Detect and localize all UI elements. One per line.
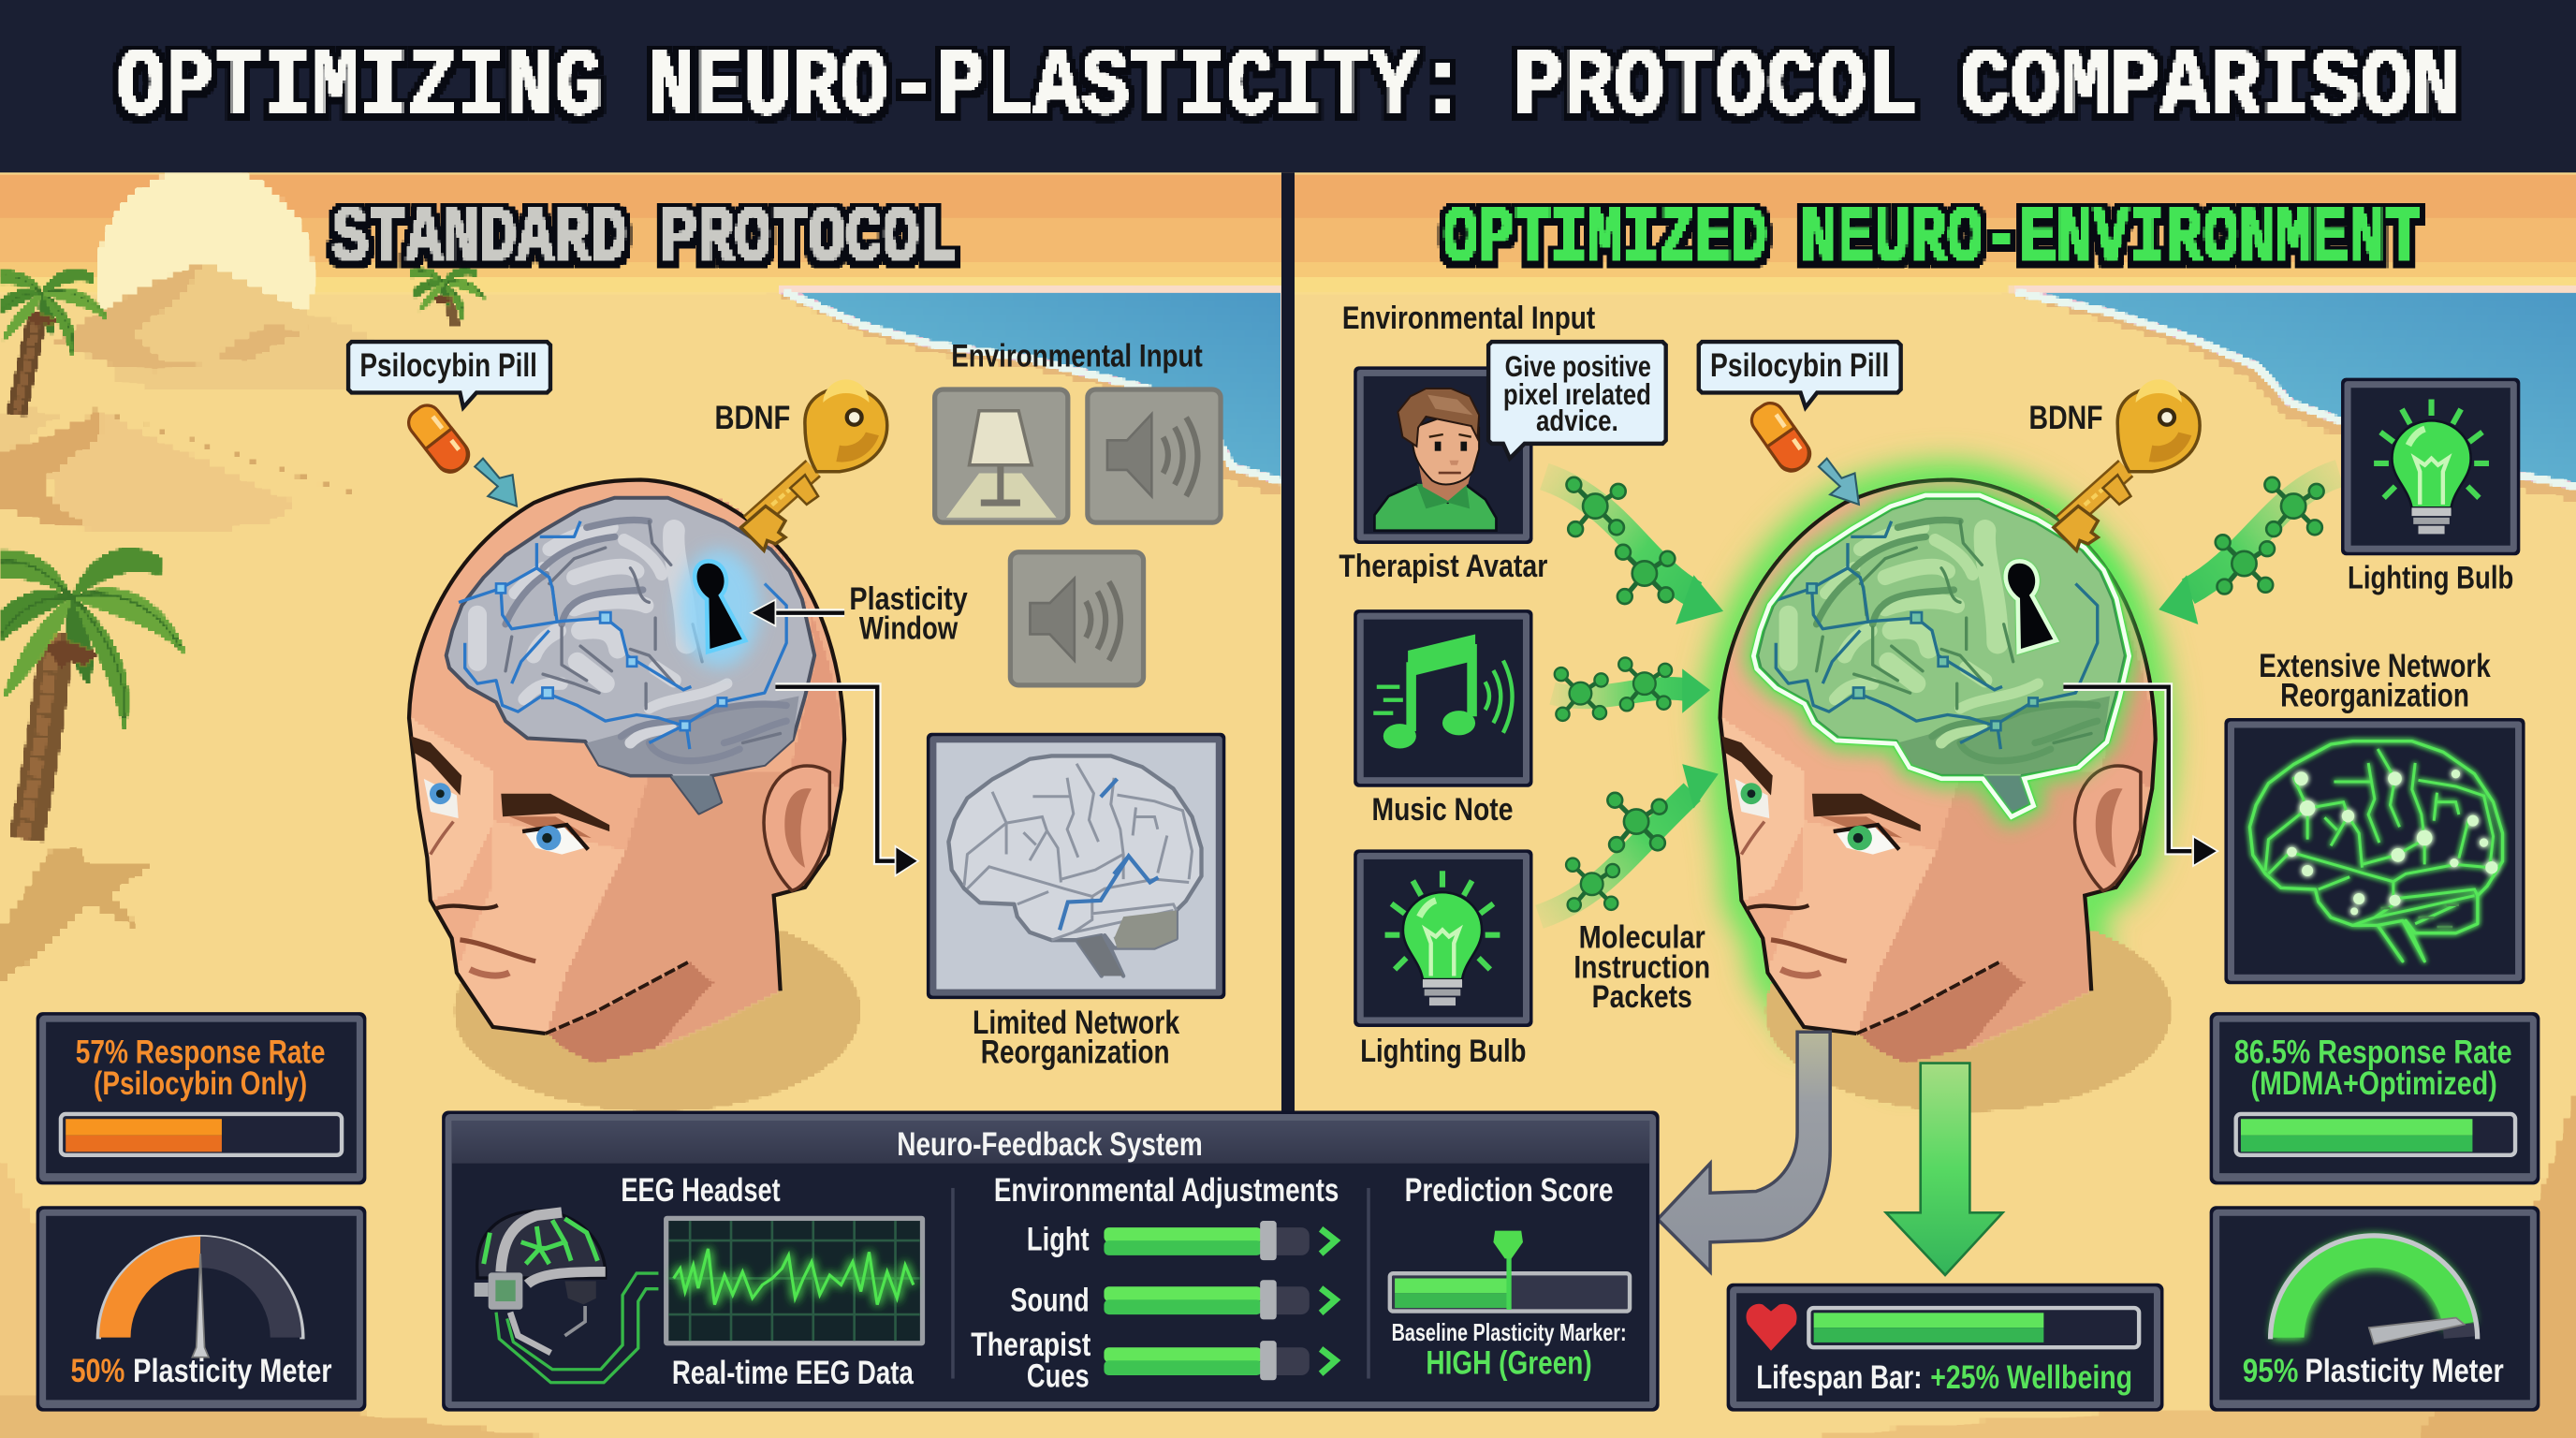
panel: lighting bulb (left column) — [1354, 849, 1533, 1027]
slider: therapist cues: Therapist — [971, 1327, 1091, 1363]
panel: standard protocol heading: STANDARD — [332, 195, 627, 284]
panel: plasticity meter (optimized): 95% — [2243, 1353, 2298, 1389]
panel: optimized heading: OPTIMIZED — [1442, 195, 1767, 284]
molecular arrow: right bulb — [2159, 473, 2339, 624]
left head with brain — [409, 479, 859, 1110]
label: limited network reorganization: Reorganization — [981, 1034, 1170, 1071]
icon: speaker lower — [1010, 552, 1144, 685]
label: lighting bulb (left column): Lighting Bulb — [1360, 1034, 1526, 1069]
label: molecular instruction packets: Packets — [1592, 979, 1692, 1015]
bar: wellbeing — [1808, 1308, 2139, 1347]
avatar figure — [1374, 389, 1496, 531]
neon brain outline — [1753, 495, 2130, 817]
section: EEG headset: Real-time EEG Data — [672, 1355, 914, 1391]
icon: heart — [1747, 1304, 1797, 1351]
section: environmental adjustments: Environmental Adjustments — [994, 1172, 1339, 1209]
brain — [1753, 495, 2130, 817]
arrow: grey feedback arrow — [1658, 1032, 1830, 1271]
label: molecular instruction packets: Instruction — [1573, 949, 1710, 985]
arrow: green wellbeing arrow — [1886, 1064, 2002, 1275]
molecular arrow: bulb — [1540, 764, 1719, 917]
slider: therapist cues: Cues — [1027, 1357, 1090, 1394]
label: extensive network reorganization: Extensive Network — [2259, 648, 2491, 684]
bubble: therapist advice: advice. — [1536, 404, 1618, 437]
molecular arrow: music — [1553, 657, 1710, 721]
label: therapist avatar: Therapist Avatar — [1339, 549, 1547, 584]
gauge 95% — [2271, 1236, 2478, 1344]
bubble: therapist advice: pixel ırelated — [1503, 377, 1651, 411]
panel: neuro-feedback system — [442, 1110, 1660, 1412]
arrow: network to reorganization (left) — [775, 687, 918, 875]
panel: standard protocol heading — [332, 195, 956, 284]
neon brain — [2249, 741, 2503, 961]
gauge 50% — [98, 1238, 302, 1357]
slider: therapist cues — [971, 1327, 1336, 1394]
icon: headset — [475, 1211, 658, 1383]
right head with green glowing brain — [1720, 479, 2170, 1110]
section: EEG headset — [475, 1172, 925, 1391]
label: molecular instruction packets: Molecular — [1579, 920, 1705, 956]
bar: 86.5% — [2236, 1114, 2515, 1155]
section: EEG headset: EEG Headset — [621, 1172, 781, 1209]
brain — [446, 498, 814, 814]
panel: limited network reorganization — [927, 733, 1225, 999]
icon: pill (right) — [1747, 398, 1815, 477]
section: prediction score: Prediction Score — [1405, 1172, 1614, 1209]
label: environmental input: Environmental Input — [951, 338, 1203, 374]
molecular arrow: therapist — [1544, 477, 1723, 624]
title: PROTOCOL — [1513, 34, 1917, 142]
label: limited network reorganization — [973, 1005, 1180, 1071]
title: NEURO-PLASTICITY: — [648, 34, 1467, 142]
panel: lifespan bar — [1727, 1284, 2163, 1412]
bubble: psilocybin pill (right) — [1699, 342, 1901, 407]
label: plasticity window: Plasticity — [849, 581, 968, 617]
panel: plasticity meter (optimized) — [2210, 1206, 2539, 1412]
panel: plasticity meter (standard): Plasticity Meter — [133, 1353, 332, 1389]
icon: bulb — [2374, 399, 2489, 534]
icon: lamp — [935, 389, 1068, 522]
label: lighting bulb (right): Lighting Bulb — [2348, 560, 2513, 595]
label: plasticity window — [849, 581, 968, 647]
label: molecular instruction packets — [1573, 920, 1710, 1015]
keyhole with blue glow — [679, 550, 760, 668]
panel: optimized heading — [1442, 195, 2422, 284]
panel: therapist avatar — [1354, 366, 1533, 544]
icon: golden key (left) — [741, 379, 887, 550]
slider: sound — [1010, 1280, 1336, 1319]
bubble: psilocybin pill (right): Psilocybin Pill — [1710, 347, 1889, 384]
panel: plasticity meter (standard): 50% — [70, 1353, 124, 1389]
label: plasticity window: Window — [859, 611, 959, 647]
bubble: psilocybin pill (left) — [348, 342, 550, 407]
slider: light: Light — [1027, 1222, 1090, 1258]
panel: plasticity meter (standard) — [37, 1206, 366, 1412]
center divider — [1281, 172, 1295, 1117]
panel: response rate (optimized) — [2210, 1012, 2539, 1184]
EEG waveform screen — [664, 1216, 925, 1345]
panel: lighting bulb (right) — [2341, 378, 2520, 555]
panel: standard protocol heading: PROTOCOL — [661, 195, 956, 284]
right environmental input label: Environmental Input — [1342, 301, 1595, 336]
panel: plasticity meter (optimized): Plasticity Meter — [2305, 1353, 2504, 1389]
icon: pill (left) — [403, 400, 474, 477]
icon: bulb — [1385, 871, 1500, 1005]
panel: lifespan bar: Lifespan Bar: — [1756, 1359, 1922, 1396]
icon: music note — [1373, 634, 1513, 748]
feedback header: Neuro-Feedback System — [897, 1126, 1203, 1163]
section: prediction score — [1390, 1172, 1630, 1381]
arrow: network to reorganization (right) — [2063, 687, 2217, 866]
section: prediction score: HIGH (Green) — [1426, 1344, 1592, 1381]
panel: music note — [1354, 609, 1533, 787]
arrow: pill to brain (right) — [1819, 459, 1859, 505]
title: OPTIMIZING — [117, 34, 603, 142]
feedback header — [452, 1121, 1649, 1164]
panel: lifespan bar: +25% Wellbeing — [1930, 1359, 2132, 1396]
label: extensive network reorganization — [2259, 648, 2491, 714]
panel: response rate (standard): (Psilocybin Only) — [94, 1065, 307, 1102]
panel: response rate (standard): 57% Response Rate — [76, 1034, 326, 1071]
bubble: therapist advice: Give positive — [1505, 349, 1651, 383]
label: BDNF (left): BDNF — [714, 400, 790, 436]
prediction bar and marker — [1390, 1231, 1630, 1312]
panel: response rate (optimized): 86.5% Response Rate — [2234, 1034, 2512, 1071]
panel: response rate (standard) — [37, 1012, 366, 1184]
label: limited network reorganization: Limited Network — [973, 1005, 1180, 1041]
header band — [0, 0, 2576, 172]
slider: sound: Sound — [1010, 1283, 1090, 1319]
left environmental input group — [935, 338, 1221, 685]
slider: light — [1027, 1221, 1336, 1260]
title: COMPARISON — [1960, 34, 2461, 142]
icon: speaker — [1088, 389, 1221, 522]
label: BDNF (right): BDNF — [2029, 400, 2103, 436]
icon: golden key (right) — [2054, 379, 2200, 550]
bubble: psilocybin pill (left): Psilocybin Pill — [359, 347, 537, 384]
bar: 57% — [61, 1114, 342, 1155]
arrow: pill to brain (left) — [475, 459, 517, 506]
section: prediction score: Baseline Plasticity Marker: — [1392, 1320, 1627, 1346]
title — [117, 34, 2461, 142]
panel: response rate (optimized): (MDMA+Optimized) — [2250, 1065, 2497, 1102]
arrow: plasticity window — [751, 600, 844, 626]
label: music note: Music Note — [1372, 792, 1513, 828]
head glow — [1720, 479, 2156, 1064]
keyhole with green glow — [2006, 561, 2056, 652]
panel: extensive network reorganization — [2224, 718, 2525, 984]
limited brain — [948, 756, 1202, 976]
bubble: therapist advice — [1488, 342, 1666, 459]
section: environmental adjustments — [971, 1172, 1339, 1394]
label: extensive network reorganization: Reorganization — [2280, 678, 2469, 714]
